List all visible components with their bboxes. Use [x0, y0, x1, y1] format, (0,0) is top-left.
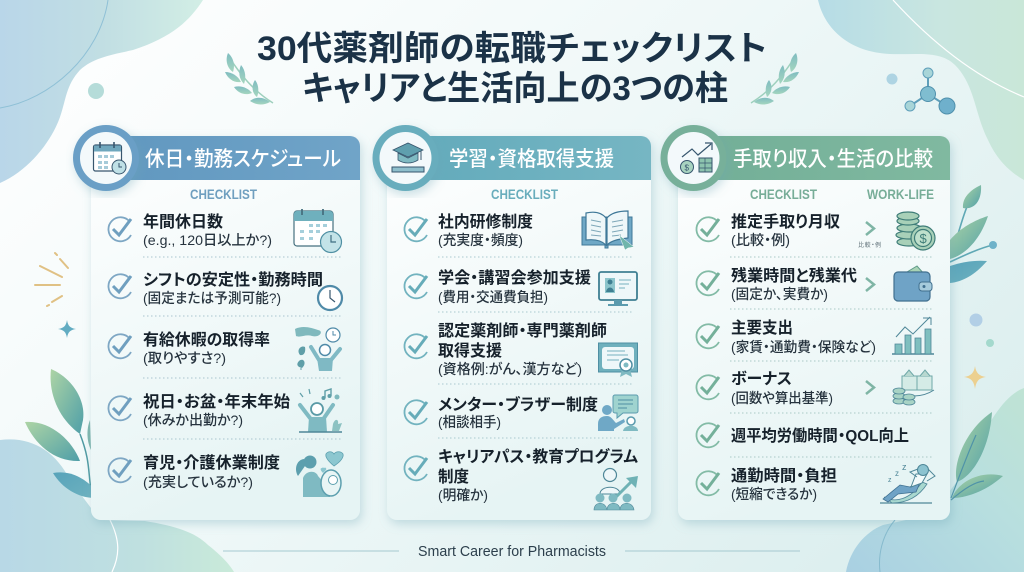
item: mentor system: (相談相手)	[438, 414, 501, 430]
icon: reclining person: z	[902, 462, 907, 472]
title	[257, 30, 767, 108]
icon: relaxed person	[295, 327, 340, 371]
icon: right laurel	[751, 53, 799, 105]
item: mentor system: メンター・ブラザー制度	[438, 395, 598, 414]
item: annual holidays	[108, 212, 272, 248]
item: conference support	[404, 268, 591, 305]
divider	[730, 308, 932, 310]
item: childcare leave: (充実しているか?)	[143, 474, 253, 490]
work-life label: WORK-LIFE	[867, 186, 934, 202]
item: conference support: 学会・講習会参加支援	[438, 268, 591, 287]
item: shift stability: (固定または予測可能?)	[143, 290, 281, 306]
icon: bar chart	[892, 317, 934, 354]
item: overtime	[696, 266, 857, 302]
divider	[730, 256, 932, 258]
panel header: 休日・勤務スケジュール	[145, 148, 341, 171]
item: commute: (短縮できるか)	[731, 486, 817, 502]
icon: certificate	[598, 343, 638, 377]
item: estimated income: 推定手取り月収	[731, 212, 840, 231]
icon: blue star	[58, 320, 76, 338]
icon: header money chart: $	[684, 164, 690, 172]
divider	[143, 256, 341, 258]
decoration: bottom-right blob	[846, 388, 1024, 572]
icon: calendar	[294, 209, 342, 252]
item: annual holidays: 年間休日数	[143, 212, 223, 231]
item: in-house training: (充実度・頻度)	[438, 232, 523, 248]
panel header	[660, 125, 950, 191]
panel header: 手取り収入・生活の比較	[733, 148, 933, 171]
item: main expenses: (家賃・通勤費・保険など)	[731, 339, 876, 355]
item: paid leave: (取りやすさ?)	[143, 350, 226, 366]
item: in-house training: 社内研修制度	[438, 212, 533, 231]
item: mentor system	[404, 395, 598, 430]
item: career path: 制度	[438, 467, 469, 486]
panel: learning and qualification support	[372, 125, 651, 520]
item: commute: 通勤時間・負担	[731, 466, 837, 485]
icon: molecule	[905, 68, 955, 114]
item: weekly hours	[696, 423, 909, 447]
icon: wallet	[894, 266, 932, 301]
panel header: 学習・資格取得支援	[449, 148, 614, 171]
item: main expenses	[696, 318, 876, 355]
item: bonus: (回数や算出基準)	[731, 390, 833, 406]
item: certified pharmacist	[404, 321, 607, 377]
panel: take-home income and living comparison	[660, 125, 950, 520]
icon: group and arrow	[594, 468, 638, 510]
divider	[438, 383, 634, 385]
icon: reclining person: z	[888, 477, 892, 484]
item: certified pharmacist: 認定薬剤師・専門薬剤師	[438, 321, 607, 340]
icon: mentor	[598, 395, 638, 431]
item: paid leave	[108, 331, 270, 366]
divider	[143, 438, 341, 440]
decoration: gold sparkle lines	[35, 253, 68, 306]
checklist label: CHECKLIST	[190, 186, 257, 202]
panel card	[91, 136, 360, 520]
item: in-house training	[404, 212, 533, 248]
item: certified pharmacist: 取得支援	[438, 341, 502, 360]
item: childcare leave	[108, 453, 280, 490]
icon: left laurel	[225, 53, 273, 105]
item: public holidays	[108, 392, 290, 428]
item: estimated income	[696, 212, 840, 248]
divider	[438, 311, 634, 313]
arrow: chevron	[866, 278, 874, 291]
item: career path: キャリアパス・教育プログラム	[438, 447, 639, 466]
icon: coins	[896, 212, 935, 250]
item: weekly hours: 週平均労働時間・QOL向上	[731, 427, 909, 445]
decoration: top-right blob	[818, 0, 1024, 180]
item: career path: (明確か)	[438, 487, 488, 503]
decoration: right bottom leaves	[951, 412, 1003, 500]
icon: header graduation cap	[392, 143, 424, 172]
item: estimated income: (比較・例)	[731, 232, 790, 248]
item: overtime: 残業時間と残業代	[731, 266, 857, 285]
panel header	[73, 125, 360, 191]
icon: header money chart	[680, 143, 712, 174]
icon: coins: $	[920, 231, 928, 246]
icon: open book	[582, 211, 634, 250]
divider	[143, 377, 341, 379]
icon: reclining person	[880, 462, 935, 503]
icon: cheering person	[299, 389, 342, 432]
footer: Smart Career for Pharmacists	[418, 543, 606, 560]
item: bonus	[696, 370, 833, 406]
divider	[438, 437, 634, 439]
divider	[438, 256, 634, 258]
panel card	[678, 136, 950, 520]
item: paid leave: 有給休暇の取得率	[143, 331, 270, 349]
item: main expenses: 主要支出	[731, 318, 793, 337]
item: shift stability: シフトの安定性・勤務時間	[143, 270, 323, 289]
panel card	[387, 136, 651, 520]
item: childcare leave: 育児・介護休業制度	[143, 453, 280, 472]
icon: money and hand	[893, 370, 934, 405]
item: public holidays: 祝日・お盆・年末年始	[143, 392, 290, 411]
item: public holidays: (休みか出勤か?)	[143, 412, 243, 428]
item: conference support: (費用・交通費負担)	[438, 289, 548, 305]
icon: monitor	[599, 272, 637, 306]
item: certified pharmacist: (資格例:がん、漢方など)	[438, 361, 582, 377]
item: overtime: (固定か、実費か)	[731, 286, 828, 302]
panel: holidays and schedule	[73, 125, 360, 520]
item: shift stability	[108, 270, 323, 306]
arrow: chevron with note	[858, 222, 881, 249]
icon: clock	[318, 286, 342, 310]
decoration: left leaves	[25, 369, 95, 498]
icon: header calendar	[94, 142, 126, 174]
item: career path	[404, 447, 639, 503]
title: 30代薬剤師の転職チェックリスト	[257, 30, 767, 68]
panel header	[372, 125, 651, 191]
arrow: chevron	[866, 381, 874, 394]
item: annual holidays: (e.g., 120日以上か?)	[143, 232, 272, 248]
icon: mother and baby	[296, 452, 343, 497]
divider	[730, 412, 932, 414]
title: キャリアと生活向上の3つの柱	[302, 70, 728, 108]
arrow: chevron with note: 比較・例	[858, 241, 881, 249]
item: commute	[696, 466, 837, 502]
checklist label: CHECKLIST	[491, 186, 558, 202]
item: bonus: ボーナス	[731, 370, 792, 388]
divider	[730, 456, 932, 458]
decoration: right dots and star	[964, 314, 994, 389]
icon: reclining person: z	[895, 469, 899, 478]
decoration: top-left blob	[0, 0, 203, 183]
decoration: right top leaves	[950, 185, 997, 283]
checklist label: CHECKLIST	[750, 186, 817, 202]
decoration: bottom-left blob	[0, 439, 234, 572]
divider	[143, 315, 341, 317]
divider	[730, 360, 932, 362]
